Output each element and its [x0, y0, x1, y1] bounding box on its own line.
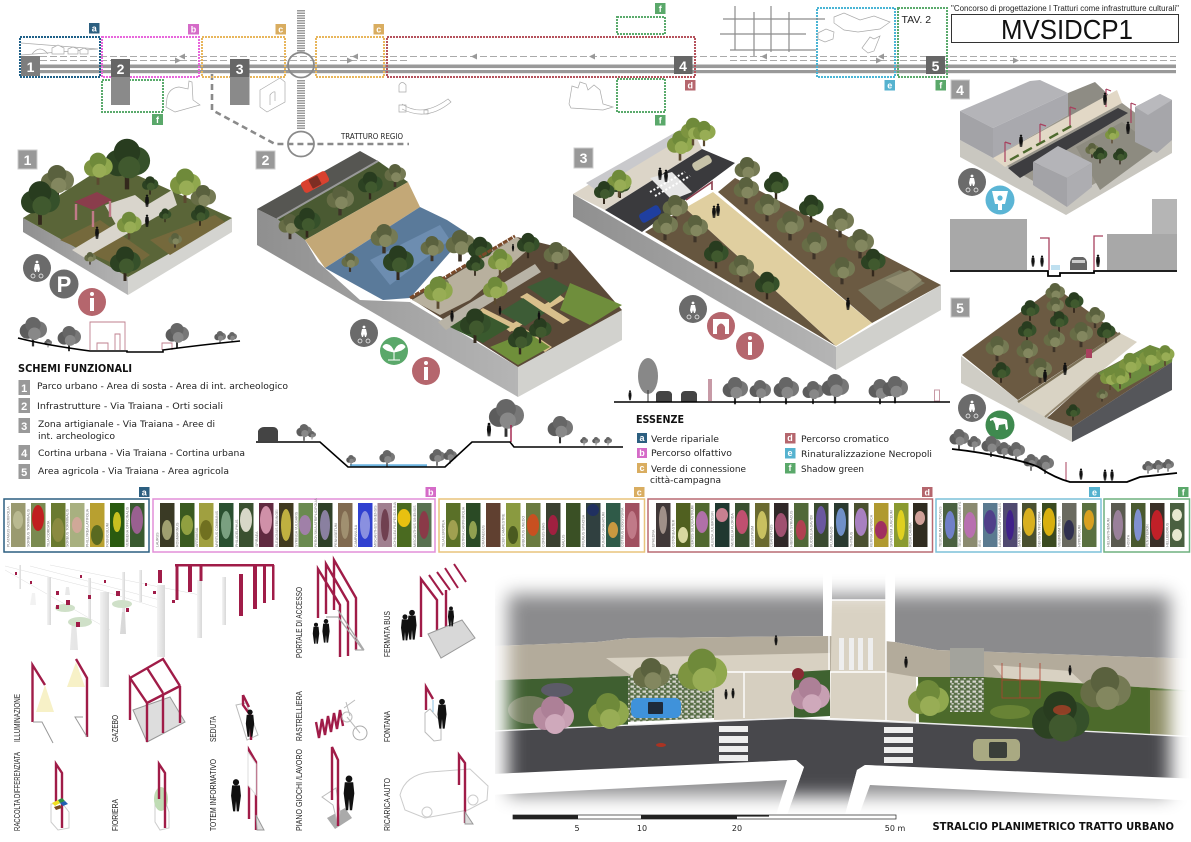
- section number markers on the route: 3: [236, 61, 244, 77]
- scale bar: 20: [732, 824, 742, 833]
- icon: information: [412, 357, 440, 385]
- zone tags: f: [156, 115, 160, 125]
- legend: essenze: città-campagna: [650, 475, 721, 486]
- top route diagram: [20, 3, 1176, 156]
- blue car: [631, 698, 681, 718]
- sketch: archaeological site 1: [21, 43, 98, 55]
- sketch: necropolis e: [818, 13, 890, 53]
- zone tags: d: [687, 80, 693, 90]
- icon: fountain: [986, 186, 1014, 214]
- cross road with junction circles: [288, 10, 314, 156]
- species strip d: BUDDLEJA DAVIDII: [809, 515, 813, 547]
- species strip a: [4, 487, 150, 552]
- species strip b: ROSMARINUS: [175, 522, 179, 547]
- zone tags: c: [376, 24, 381, 34]
- species strip c: MALUS: [561, 534, 565, 547]
- species strip d: d: [924, 488, 930, 498]
- species strip c: OSTRYA CARPINIFOLIA: [461, 506, 465, 547]
- table number: TAV. 2: [902, 14, 931, 26]
- list: schemi funzionali: Cortina urbana - Via Traiana - Cortina urbana: [38, 448, 245, 459]
- species strip f: PENSTEMON: [1145, 524, 1149, 547]
- species strip a: PLATANUS ACERIFOLIA: [7, 506, 11, 547]
- legend: essenze: a: [639, 433, 645, 443]
- species strip e: TEUCRIUM FRUTICANS: [938, 506, 942, 547]
- legend: essenze: Percorso cromatico: [801, 434, 889, 445]
- species strip b: PHILADELPHUS: [235, 519, 239, 547]
- street furniture: rastrelliera: [294, 691, 367, 741]
- species strip e: HYPERICUM: [1077, 525, 1081, 547]
- section number markers on the route: 1: [27, 59, 35, 75]
- isometric block 1: [21, 139, 232, 295]
- icon: pedestrian and cycle: [679, 295, 707, 323]
- street furniture: fontana: [382, 687, 447, 742]
- species strip c: TILIA EUROPEA: [441, 519, 445, 547]
- species strip d: WEIGELIA FLORIDA: [730, 513, 734, 547]
- dotted zone boxes: [20, 8, 947, 112]
- species strip f: f: [1182, 488, 1186, 498]
- species strip b: [153, 487, 436, 552]
- street furniture: raccolta differenziata: [12, 752, 69, 831]
- panel 1: parco urbano: [18, 139, 240, 352]
- icon: information: [736, 332, 764, 360]
- species strip c: CRATAEGUS: [481, 525, 485, 547]
- icon: arch: [707, 312, 735, 340]
- section number markers on the route: 5: [932, 58, 940, 74]
- zone tags: a: [92, 24, 98, 34]
- street furniture: rastrelliera: RASTRELLIERA: [294, 691, 304, 741]
- street furniture: ricarica auto: [382, 755, 488, 831]
- legend: essenze: Percorso olfattivo: [651, 448, 732, 459]
- icon: parking: [50, 270, 78, 298]
- panel 4: cortina urbana: [950, 80, 1177, 276]
- species strip d: PLUMBAGO: [829, 526, 833, 547]
- species strip f: HELIANTHEMUM: [1106, 518, 1110, 547]
- section 1: [18, 317, 240, 352]
- scale bar: 50 m: [885, 824, 905, 833]
- species strip c: PRUNUS SPINOSA: [581, 514, 585, 547]
- species strip a: TILIA CORDATA: [47, 520, 51, 547]
- icon: parking: P: [57, 272, 71, 297]
- species strip d: KERRIA JAPONICA: [869, 514, 873, 547]
- tratturo regio label: TRATTURO REGIO: [340, 132, 403, 141]
- project code box: [952, 14, 1178, 45]
- species strip b: PENNISETUM: [334, 523, 338, 547]
- species strip e: LAVANDULA OFFICINALIS: [998, 503, 1002, 547]
- panel 2: infrastrutture e orti: [256, 151, 623, 467]
- species strip b: SPIRAEA: [255, 531, 259, 547]
- species strip f: [1104, 487, 1190, 552]
- species strip e: GENISTA TINCTORIA: [1037, 511, 1041, 547]
- species strip c: PUNICA GRANATUM: [601, 512, 605, 547]
- section number markers on the route: 4: [679, 58, 687, 74]
- street furniture: illuminazione: [12, 659, 87, 743]
- section 4: [950, 199, 1177, 276]
- panel 3: zona artigianale: [573, 118, 950, 404]
- species strip b: LAURUS: [155, 532, 159, 547]
- street furniture: fermata bus: [382, 564, 475, 658]
- species strip d: ALBIZIA JULIBRISSIN: [710, 511, 714, 547]
- species strip d: CEANOTHUS: [769, 524, 773, 547]
- species strip f: HELLEBORUS: [1165, 522, 1169, 547]
- scale bar: 5: [574, 824, 580, 833]
- list: schemi funzionali: Parco urbano - Area di sosta - Area di int. archeologico: [37, 381, 288, 392]
- species strip f: HOSTA: [1126, 534, 1130, 547]
- plan sidewalk and plaza: [496, 582, 1182, 722]
- legend: essenze: f: [788, 463, 792, 473]
- species strip c: ACER CAMPESTRE: [501, 513, 505, 547]
- competition subtitle: "Concorso di progettazione I Tratturi come infrastrutture culturali": [951, 4, 1179, 13]
- number 2: [256, 151, 275, 169]
- street furniture: portale di accesso: PORTALE DI ACCESSO: [294, 587, 304, 658]
- legend: essenze: d: [787, 433, 793, 443]
- section 3: [614, 358, 950, 404]
- section 5: [950, 429, 1177, 482]
- number 4: 4: [956, 82, 964, 98]
- species strip c: [439, 487, 644, 552]
- isometric block 5: [961, 283, 1174, 442]
- zone tags: f: [939, 80, 943, 90]
- list: schemi funzionali: [18, 380, 288, 479]
- species strip d: EPHEDRA: [651, 529, 655, 547]
- plan planting beds: [470, 670, 1191, 737]
- species strip b: CAMPANULA: [354, 524, 358, 547]
- project code box: MVSIDCP1: [1001, 14, 1133, 45]
- sketch: arch c: [260, 78, 285, 112]
- street furniture: seduta: SEDUTA: [208, 716, 218, 742]
- number 3: 3: [580, 150, 588, 166]
- legend: essenze: b: [639, 448, 645, 458]
- species strip b: SYRINGA VULGARIS: [294, 511, 298, 547]
- legend: essenze: Shadow green: [801, 464, 864, 475]
- species strip d: THYMUS: [849, 531, 853, 547]
- zone tags: b: [191, 24, 197, 34]
- site plan: urban stretch: [495, 582, 1185, 810]
- number 5: [951, 298, 970, 317]
- list: schemi funzionali: 4: [21, 448, 28, 460]
- species strip b: MISCANTHUS SINENSIS: [413, 505, 417, 547]
- zone tags: [89, 3, 946, 126]
- street furniture: illuminazione: ILLUMINAZIONE: [12, 694, 22, 742]
- pedestrian crossings: [719, 638, 913, 763]
- number 5: 5: [956, 300, 964, 316]
- number 3: [574, 148, 593, 168]
- zone tags: e: [887, 80, 892, 90]
- isometric block 2: [257, 151, 622, 397]
- species strip d: HIBISCUS SYRIACUS: [789, 510, 793, 547]
- species strip d: ROSA CANINA: [908, 522, 912, 547]
- panel 5: area agricola: [950, 283, 1177, 482]
- species strip d: COTONEASTER: [671, 519, 675, 547]
- species strip b: ARTEMISIA: [195, 527, 199, 547]
- list: schemi funzionali: 3: [21, 421, 27, 433]
- red frame: [1002, 663, 1040, 698]
- icon: orti sprout: [380, 337, 408, 365]
- direction arrows: [175, 54, 1019, 64]
- species strip c: ARBUTUS UNEDO: [521, 516, 525, 547]
- species strip c: COTINUS COGGYGRIA: [620, 507, 624, 547]
- icon: horse: [986, 410, 1014, 440]
- list: schemi funzionali: 2: [21, 401, 27, 413]
- species strip b: ELEAGNUS EBBINGEI: [275, 509, 279, 547]
- plan vignette: [495, 570, 1191, 815]
- legend: essenze: c: [639, 463, 645, 473]
- road bands: [40, 64, 1176, 73]
- species strip c: c: [637, 488, 642, 498]
- heading: essenze: ESSENZE: [636, 413, 684, 426]
- species strip a: PHILLYREA LATIFOLIA: [86, 508, 90, 547]
- number 1: [18, 150, 37, 169]
- number 4: [951, 80, 970, 99]
- species strip b: PEROVSKIA ATRIPLICIFOLIA: [314, 498, 318, 547]
- isometric block 4: [960, 80, 1172, 215]
- species strip e: [936, 487, 1101, 552]
- species strip a: SORBUS TORMINALIS: [27, 508, 31, 547]
- icon: pedestrian and cycle: [350, 319, 378, 347]
- species strip d: [648, 487, 932, 552]
- species strip d: LIGUSTRUM: [750, 526, 754, 547]
- sketch: amphitheatre: [399, 82, 451, 114]
- section number markers on the route: 2: [117, 61, 125, 77]
- street furniture: seduta: [208, 695, 258, 742]
- sketch: building b: [166, 81, 200, 112]
- scale bar: 10: [637, 824, 647, 833]
- list: schemi funzionali: 1: [21, 383, 27, 395]
- species strip e: SANTOLINA: [1017, 526, 1021, 547]
- species strip b: MYRTUS COMMUNIS: [215, 510, 219, 547]
- list: schemi funzionali: Area agricola - Via Traiana - Area agricola: [38, 466, 229, 477]
- legend: essenze: Rinaturalizzazione Necropoli: [801, 449, 932, 460]
- street furniture: fontana: FONTANA: [382, 711, 392, 742]
- street furniture: portale di accesso: [294, 560, 364, 658]
- isometric block 3: [573, 118, 941, 370]
- plan curbs: [470, 718, 1191, 815]
- street furniture: totem informativo: [208, 750, 264, 831]
- plan people: [656, 635, 1072, 747]
- species strip e: VIBURNUM TINUS: [1057, 516, 1061, 547]
- dashed cycle and pedestrian paths: [40, 56, 1176, 60]
- legend: essenze: Verde ripariale: [651, 434, 719, 445]
- section 2: [256, 399, 623, 467]
- olive car: [973, 739, 1020, 761]
- number 1: 1: [24, 152, 32, 168]
- list: schemi funzionali: int. archeologico: [38, 431, 115, 442]
- species strip b: b: [428, 488, 434, 498]
- street furniture: piano giochi lavoro: [294, 747, 354, 831]
- street furniture: ricarica auto: RICARICA AUTO: [382, 778, 392, 831]
- plan title: STRALCIO PLANIMETRICO TRATTO URBANO: [932, 821, 1174, 833]
- plan buildings: [496, 582, 1182, 658]
- tratturo regio dashed route: [212, 74, 409, 144]
- street furniture: piano giochi lavoro: PIANO GIOCHI /LAVORO: [294, 749, 304, 831]
- species strip b: MISCANTHUS SINENSIS: [373, 505, 377, 547]
- icon: information: [78, 288, 106, 316]
- street furniture: fioriera: FIORIERA: [110, 799, 120, 831]
- street furniture: fioriera: [110, 764, 169, 831]
- street furniture: gazebo: GAZEBO: [110, 715, 120, 742]
- zone tags: c: [278, 24, 283, 34]
- icon: pedestrian and cycle: [23, 254, 51, 282]
- number 2: 2: [262, 152, 270, 168]
- list: schemi funzionali: Infrastrutture - Via Traiana - Orti sociali: [37, 401, 223, 412]
- species strip e: e: [1092, 488, 1097, 498]
- species strip a: a: [142, 488, 148, 498]
- legend: essenze: [637, 433, 932, 486]
- legend: essenze: e: [787, 448, 793, 458]
- species strip d: CERCIS SILIQUASTRUM: [690, 505, 694, 547]
- legend: essenze: Verde di connessione: [651, 464, 746, 475]
- list: schemi funzionali: Zona artigianale - Via Traiana - Aree di: [38, 419, 215, 430]
- street grid sketch: [720, 6, 825, 56]
- scale bar: [513, 815, 905, 833]
- section number markers on the route: [21, 56, 945, 105]
- plan road: [470, 718, 1191, 815]
- species strip a: FOENICULUM: [106, 523, 110, 547]
- street furniture: totem informativo: TOTEM INFORMATIVO: [208, 759, 218, 831]
- street furniture: gazebo: [110, 659, 185, 742]
- species strip e: TEUCRIUM CHAMAEDRYS: [958, 501, 962, 547]
- list: schemi funzionali: 5: [21, 467, 27, 479]
- species strip b: ACHILLEA FILIPENDULINA: [393, 501, 397, 547]
- icon: pedestrian and cycle: [958, 394, 986, 422]
- zone tags: f: [659, 4, 663, 14]
- species strip d: SPARTIUM JUNCEUM: [889, 510, 893, 547]
- sketch: ruin d: [569, 82, 613, 110]
- plan trees: [533, 649, 1131, 742]
- species strip a: VERBENA OFFICINALIS: [126, 506, 130, 547]
- species strip a: SORBUS TORMINALIS: [66, 508, 70, 547]
- species strip c: CORNUS MAS: [541, 522, 545, 547]
- vineyard and pergola perspective: [5, 564, 274, 687]
- street furniture: raccolta differenziata: RACCOLTA DIFFERENZIATA: [12, 752, 22, 831]
- zone tags: f: [659, 116, 663, 126]
- icon: pedestrian and cycle: [958, 168, 986, 196]
- species strip e: IRIS: [978, 539, 982, 547]
- heading: schemi funzionali: SCHEMI FUNZIONALI: [18, 362, 132, 375]
- street furniture: fermata bus: FERMATA BUS: [382, 611, 392, 657]
